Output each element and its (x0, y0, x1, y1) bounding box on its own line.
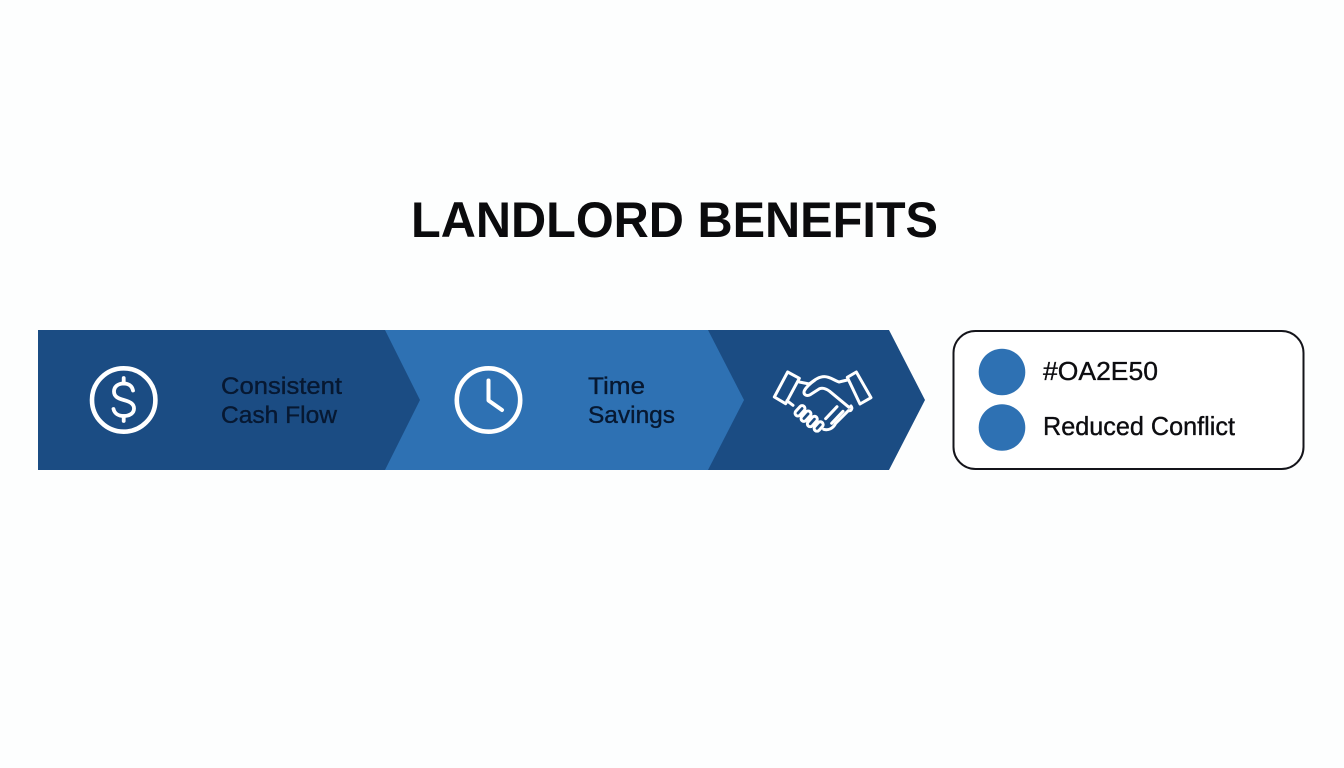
legend dot: first (979, 349, 1025, 395)
panel: legend box (954, 331, 1304, 469)
panel: benefits chevron band (38, 330, 925, 470)
text: consistent cash flow (221, 373, 342, 429)
icon: clock (457, 368, 520, 432)
icon: dollar coin (92, 368, 155, 432)
text: time savings: Time (588, 373, 645, 400)
panel: first chevron, consistent cash flow (38, 330, 420, 470)
text: consistent cash flow: Cash Flow (221, 402, 338, 429)
panel: third chevron, reduced conflict (700, 330, 925, 470)
icon: handshake (774, 372, 871, 432)
text: time savings: Savings (588, 402, 675, 429)
legend dot: second (979, 404, 1025, 451)
legend label: first: #OA2E50 (1043, 356, 1158, 386)
text: time savings (588, 373, 675, 429)
panel: second chevron, time savings (375, 330, 744, 470)
legend label: second: Reduced Conflict (1043, 411, 1236, 441)
text: consistent cash flow: Consistent (221, 373, 342, 400)
title: LANDLORD BENEFITS (411, 192, 938, 248)
